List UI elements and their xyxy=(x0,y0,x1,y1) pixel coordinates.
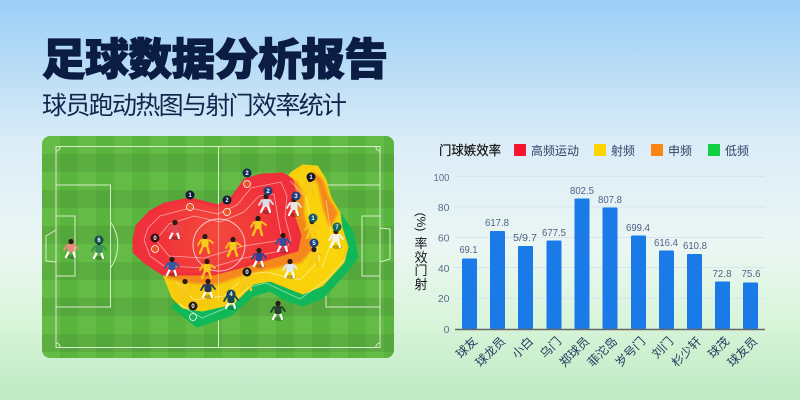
x axis labels: 刘门 xyxy=(649,334,676,361)
bar value labels: 617.8 xyxy=(485,217,509,229)
player: yellow lower left xyxy=(178,279,193,298)
y axis label: 效 xyxy=(414,250,428,265)
player: top three xyxy=(287,197,301,217)
y axis ticks: 0 xyxy=(444,324,450,336)
player: orange blue xyxy=(276,233,290,253)
y axis label: 射 xyxy=(414,277,428,292)
bars xyxy=(462,198,758,329)
halfway line over heat xyxy=(218,196,220,300)
badge 2 xyxy=(222,196,232,204)
y axis ticks: 80 xyxy=(438,202,450,214)
x axis labels: 球友 xyxy=(453,334,480,361)
bar value labels: 807.8 xyxy=(598,194,622,206)
player: top two xyxy=(259,194,273,214)
y axis label: (%) xyxy=(414,213,428,231)
x axis labels: 球茂 xyxy=(705,334,732,361)
player: dark shirt xyxy=(252,248,266,268)
bar value labels: 69.1 xyxy=(460,244,478,256)
badge left dark: 0 xyxy=(153,236,157,242)
badge 7 xyxy=(332,222,342,232)
y axis ticks: 100 xyxy=(434,172,450,184)
badge lower 0: 0 xyxy=(245,270,249,276)
badge 3: 3 xyxy=(294,194,298,200)
player: yellow two xyxy=(226,237,241,256)
subtitle: 球员跑动热图与射门效率统计 xyxy=(42,92,347,120)
y axis ticks: 20 xyxy=(438,293,450,305)
bar value labels: 802.5 xyxy=(570,185,594,197)
x axis labels: 球龙员 xyxy=(473,334,508,370)
bar value labels: 72.8 xyxy=(712,268,732,280)
badge 2 top: 2 xyxy=(245,171,249,177)
player: navy lower two xyxy=(201,279,215,299)
badge 3 xyxy=(292,192,300,200)
x axis labels: 小白 xyxy=(509,334,536,361)
bar value labels: 75.6 xyxy=(742,268,761,280)
legend title: 门球嫉效率 xyxy=(439,143,501,158)
x axis labels: 杉少轩 xyxy=(669,334,704,370)
badge low dark: 0 xyxy=(191,304,195,310)
legend: high: 高频运动 xyxy=(531,143,579,158)
player: navy lower xyxy=(224,290,238,310)
bar value labels: 677.5 xyxy=(542,227,566,239)
badge keeper side: 6 xyxy=(97,238,101,244)
position rings xyxy=(152,180,250,320)
badge 1: 1 xyxy=(188,193,192,199)
number badges xyxy=(94,168,342,320)
zone: mid frequency orange band xyxy=(152,180,312,284)
player: yellow mid right xyxy=(305,219,320,238)
player: white blue xyxy=(283,259,297,279)
players xyxy=(64,177,343,321)
y axis ticks xyxy=(434,172,450,336)
legend: low: 低频 xyxy=(725,144,749,158)
y axis ticks: 60 xyxy=(438,232,450,244)
legend: high xyxy=(514,143,579,158)
x axis labels: 乌门 xyxy=(537,334,564,361)
badge 1 top right: 1 xyxy=(309,175,313,181)
badge 2: 2 xyxy=(225,198,229,204)
heat contour lines xyxy=(144,181,346,318)
bar value labels xyxy=(460,185,761,280)
y axis label xyxy=(414,213,428,292)
badge lower 4 xyxy=(226,290,236,298)
badge low dark xyxy=(188,302,198,310)
zone: high frequency red xyxy=(134,174,300,274)
zone: shot frequency yellow xyxy=(165,166,347,310)
panel: pitch heatmap xyxy=(42,136,394,358)
badge 2 top xyxy=(242,168,252,178)
legend xyxy=(514,143,749,158)
x axis labels: 岁号门 xyxy=(612,334,648,370)
player: red shirt xyxy=(168,220,182,240)
y axis label: 率 xyxy=(414,236,428,251)
player: yellow one xyxy=(198,234,213,253)
zone: mid frequency orange strip xyxy=(312,172,337,226)
legend: mid: 申频 xyxy=(668,144,692,158)
player: yellow lower xyxy=(240,271,255,290)
badge 5: 5 xyxy=(312,241,316,247)
player: yellow top right xyxy=(303,177,318,196)
badge lower 4: 4 xyxy=(229,292,233,298)
y axis ticks: 40 xyxy=(438,263,450,275)
x axis labels: 郑球员 xyxy=(556,334,592,370)
badge 7: 7 xyxy=(335,225,339,231)
badge 1 teal xyxy=(308,214,318,222)
heat zones xyxy=(134,166,357,326)
panel: bar chart xyxy=(414,143,765,370)
x axis line xyxy=(455,328,765,330)
player: blue shirt xyxy=(165,257,179,277)
legend: shot: 射频 xyxy=(611,143,635,158)
title: 足球数据分析报告 xyxy=(42,37,388,85)
badge keeper side xyxy=(94,236,104,244)
pitch markings xyxy=(46,146,390,348)
grid lines xyxy=(455,176,765,298)
player: defender near goal xyxy=(92,240,106,260)
x axis labels xyxy=(453,334,760,370)
badge lower 0 xyxy=(242,268,252,276)
bar value labels: 616.4 xyxy=(654,237,678,249)
badge 5 xyxy=(310,238,318,248)
player: yellow low right xyxy=(307,247,322,266)
centre circle over heat xyxy=(193,219,245,271)
bar value labels: 610.8 xyxy=(683,240,707,252)
badge 2 right: 2 xyxy=(266,189,270,195)
player: far right white xyxy=(329,229,343,249)
player: yellow three xyxy=(251,216,266,235)
pitch turf xyxy=(42,136,394,358)
badge 1 xyxy=(186,190,194,200)
badge 2 right xyxy=(264,186,272,196)
player: yellow four xyxy=(200,259,215,278)
bar value labels: 5/9.7 xyxy=(513,232,537,244)
player: green outside xyxy=(271,301,285,321)
y axis label: 门 xyxy=(414,263,428,278)
bar value labels: 699.4 xyxy=(626,222,650,234)
player: goalkeeper xyxy=(64,239,78,259)
badge 1 teal: 1 xyxy=(311,216,315,222)
x axis labels: 球友员 xyxy=(725,334,760,370)
legend: mid xyxy=(651,144,692,158)
x axis labels: 菲沱岛 xyxy=(584,334,620,370)
legend: low xyxy=(708,144,749,158)
zone: low frequency green xyxy=(173,213,357,326)
legend: shot xyxy=(594,143,635,158)
badge 1 top right xyxy=(306,172,316,182)
badge left dark xyxy=(150,234,160,242)
